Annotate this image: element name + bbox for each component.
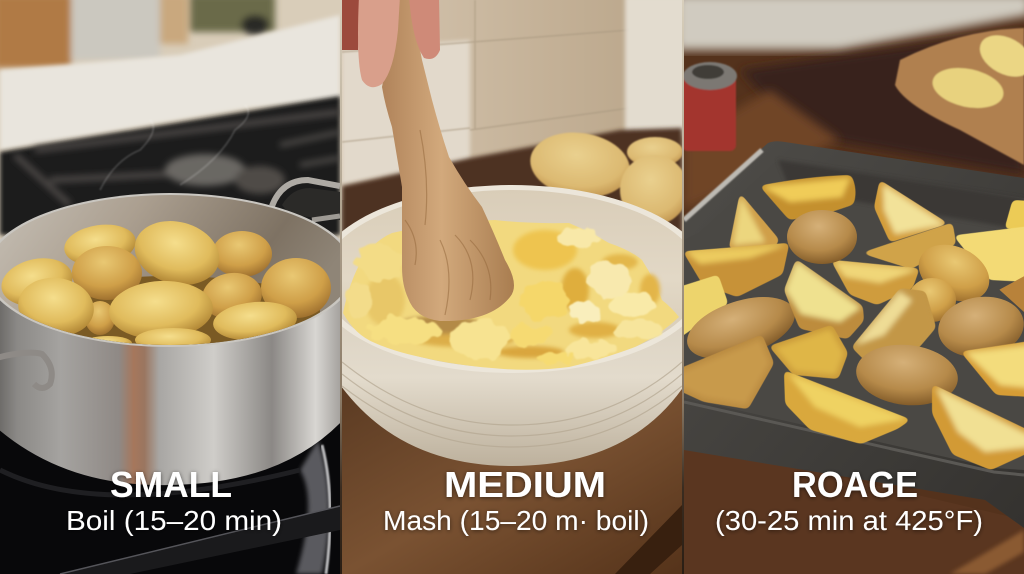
panel: roast (676, 0, 1024, 574)
background wood (676, 0, 1024, 574)
caption: roage (715, 464, 983, 536)
wall and counter (342, 0, 687, 240)
spoon handle on stove (60, 506, 340, 574)
pot handle (272, 180, 340, 220)
background potatoes (529, 132, 682, 222)
pot interior (0, 195, 352, 345)
panel: boil (0, 0, 355, 574)
caption: roage: (30-25 min at 425°F) (715, 505, 983, 536)
bowl rim (342, 185, 682, 373)
cutting board (895, 27, 1024, 165)
caption: medium (383, 464, 649, 536)
hand (342, 0, 440, 87)
bowl body (342, 326, 682, 466)
side handle (0, 353, 52, 388)
roasted potatoes (676, 177, 1024, 468)
caption: small: Boil (15–20 min) (66, 505, 282, 536)
kitchen background (0, 0, 340, 240)
pot rim (0, 193, 355, 347)
potatoes in pot (2, 221, 331, 345)
baking tray (684, 141, 1024, 528)
caption: medium: MEDIUM (444, 464, 606, 505)
pot body (0, 300, 340, 486)
wooden board (342, 380, 682, 574)
caption: roage: ROAGE (792, 464, 918, 505)
bowl interior (342, 190, 682, 366)
mashed potato (343, 220, 679, 370)
stove base (0, 420, 340, 574)
caption: medium: Mash (15–20 m· boil) (383, 505, 649, 536)
board edge (615, 505, 682, 574)
steam (100, 105, 248, 190)
wooden masher (382, 0, 514, 321)
caption: small: SMALL (110, 464, 232, 505)
stove reflections (0, 440, 330, 574)
red tin (682, 62, 737, 151)
panel: mash (342, 0, 682, 574)
caption: small (66, 464, 282, 536)
